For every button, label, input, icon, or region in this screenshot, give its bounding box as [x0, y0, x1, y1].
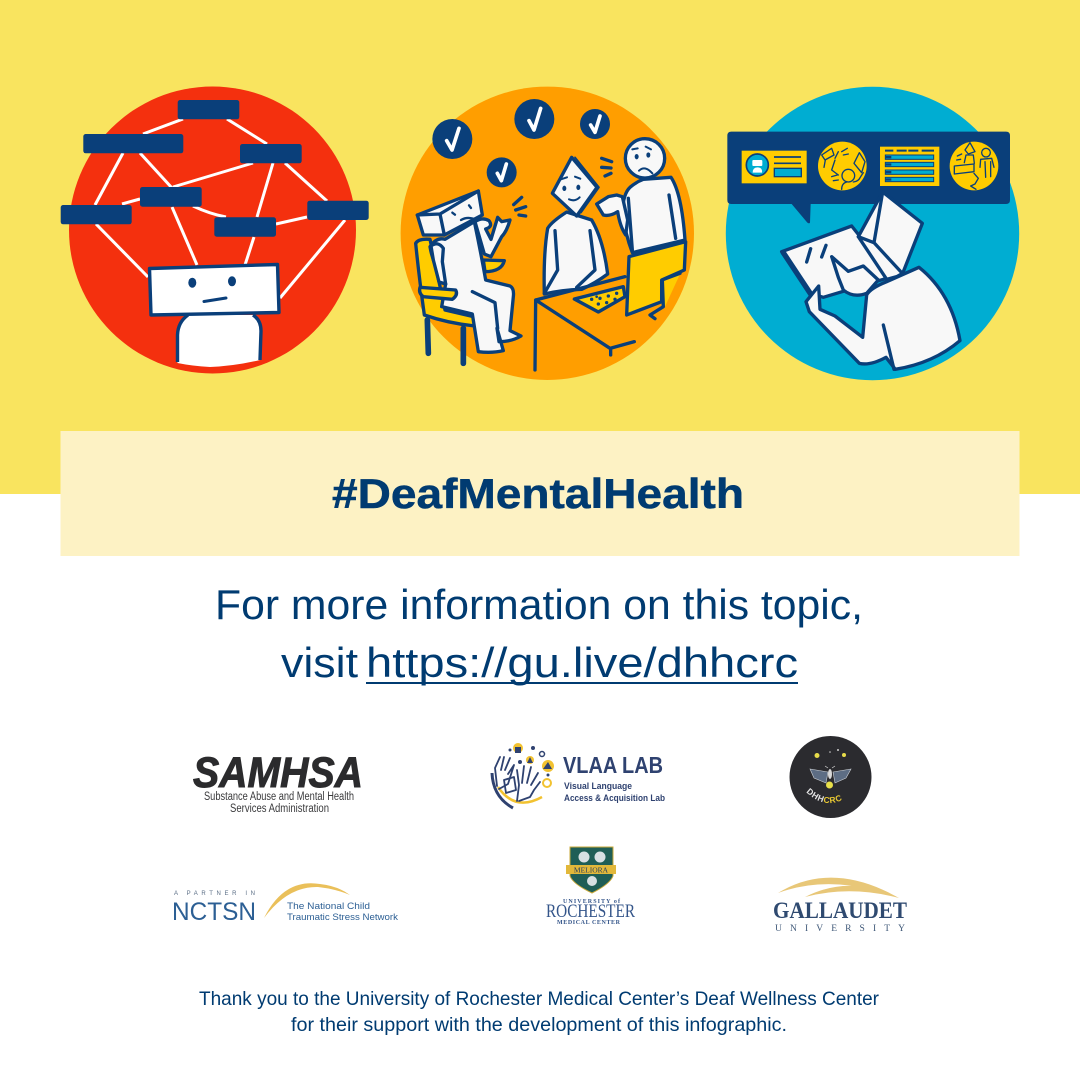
logo: Gallaudet University: UNIVERSITY: [775, 924, 905, 934]
logo: NCTSN: Traumatic Stress Network: [287, 912, 398, 923]
logo: DHHCRC: [790, 736, 872, 818]
panel: blue circle reading illustration: [726, 87, 1019, 380]
arcs: [778, 878, 899, 898]
thumbnail: table: [880, 147, 939, 186]
logo: DHHCRC: DHHCRC: [806, 788, 842, 804]
yellow header background: [0, 0, 1080, 494]
logo: VLAA LAB: VLAA LAB: [563, 752, 663, 778]
text block: more information: For more information on this topic,: [215, 581, 863, 628]
text block: acknowledgement: for their support with the development of this infographic.: [291, 1014, 787, 1036]
logo: NCTSN: The National Child: [287, 901, 370, 912]
logo: VLAA LAB: [492, 743, 665, 808]
text block: more information: visit: [281, 639, 358, 686]
heading: hashtag: #DeafMentalHealth: [332, 470, 744, 517]
panel: red circle network illustration: [61, 86, 369, 374]
logo: Gallaudet University: [773, 878, 907, 934]
speech bubble with resource thumbnails: [727, 132, 1010, 223]
logo: SAMHSA: [193, 749, 363, 815]
desk with keyboard and monitor: [535, 242, 686, 370]
thumbnail: circle scene one: [818, 142, 867, 190]
logo: VLAA LAB: Access & Acquisition Lab: [564, 793, 665, 804]
logo: Gallaudet University: GALLAUDET: [773, 898, 907, 923]
logo: University of Rochester Medical Center: MEDICAL CENTER: [557, 920, 621, 926]
therapist with diamond head: [544, 157, 612, 294]
logo: University of Rochester Medical Center: UNIVERSITY of: [563, 899, 621, 905]
text block: acknowledgement: Thank you to the University of Rochester Medical Center’s Deaf Wellness Center: [199, 988, 879, 1010]
check mark bubbles: [432, 99, 610, 187]
text block: acknowledgement: [199, 988, 879, 1036]
logo: SAMHSA: SAMHSA: [193, 749, 363, 797]
logo: NCTSN: A PARTNER IN: [174, 891, 255, 897]
seated client in chair: [416, 191, 526, 363]
icon: firefly: [810, 749, 851, 788]
thumbnail: circle scene two: [950, 142, 998, 190]
logo: SAMHSA: Substance Abuse and Mental Health: [204, 791, 354, 803]
logo: NCTSN: NCTSN: [172, 898, 256, 926]
panel: orange circle clinic illustration: [401, 87, 694, 380]
standing interpreter: [597, 139, 685, 253]
logo: NCTSN: [172, 883, 398, 926]
thumbnail: profile card: [742, 151, 807, 183]
icon: signing hands with shapes: [492, 743, 554, 808]
arc: [264, 883, 350, 918]
network connecting lines: [95, 119, 345, 298]
character with rectangular head: [150, 264, 279, 367]
network nodes: [61, 100, 369, 237]
text block: more information: https://gu.live/dhhcrc: [366, 639, 798, 686]
text block: more information: [215, 581, 863, 686]
shield crest: MELIORA: [574, 866, 609, 874]
logo: University of Rochester Medical Center: [546, 847, 635, 926]
person reading a tablet: [782, 192, 960, 369]
logo: VLAA LAB: Visual Language: [564, 781, 632, 792]
hashtag banner: [60, 431, 1020, 556]
logo: SAMHSA: Services Administration: [230, 803, 329, 815]
logo: University of Rochester Medical Center: ROCHESTER: [546, 901, 635, 922]
